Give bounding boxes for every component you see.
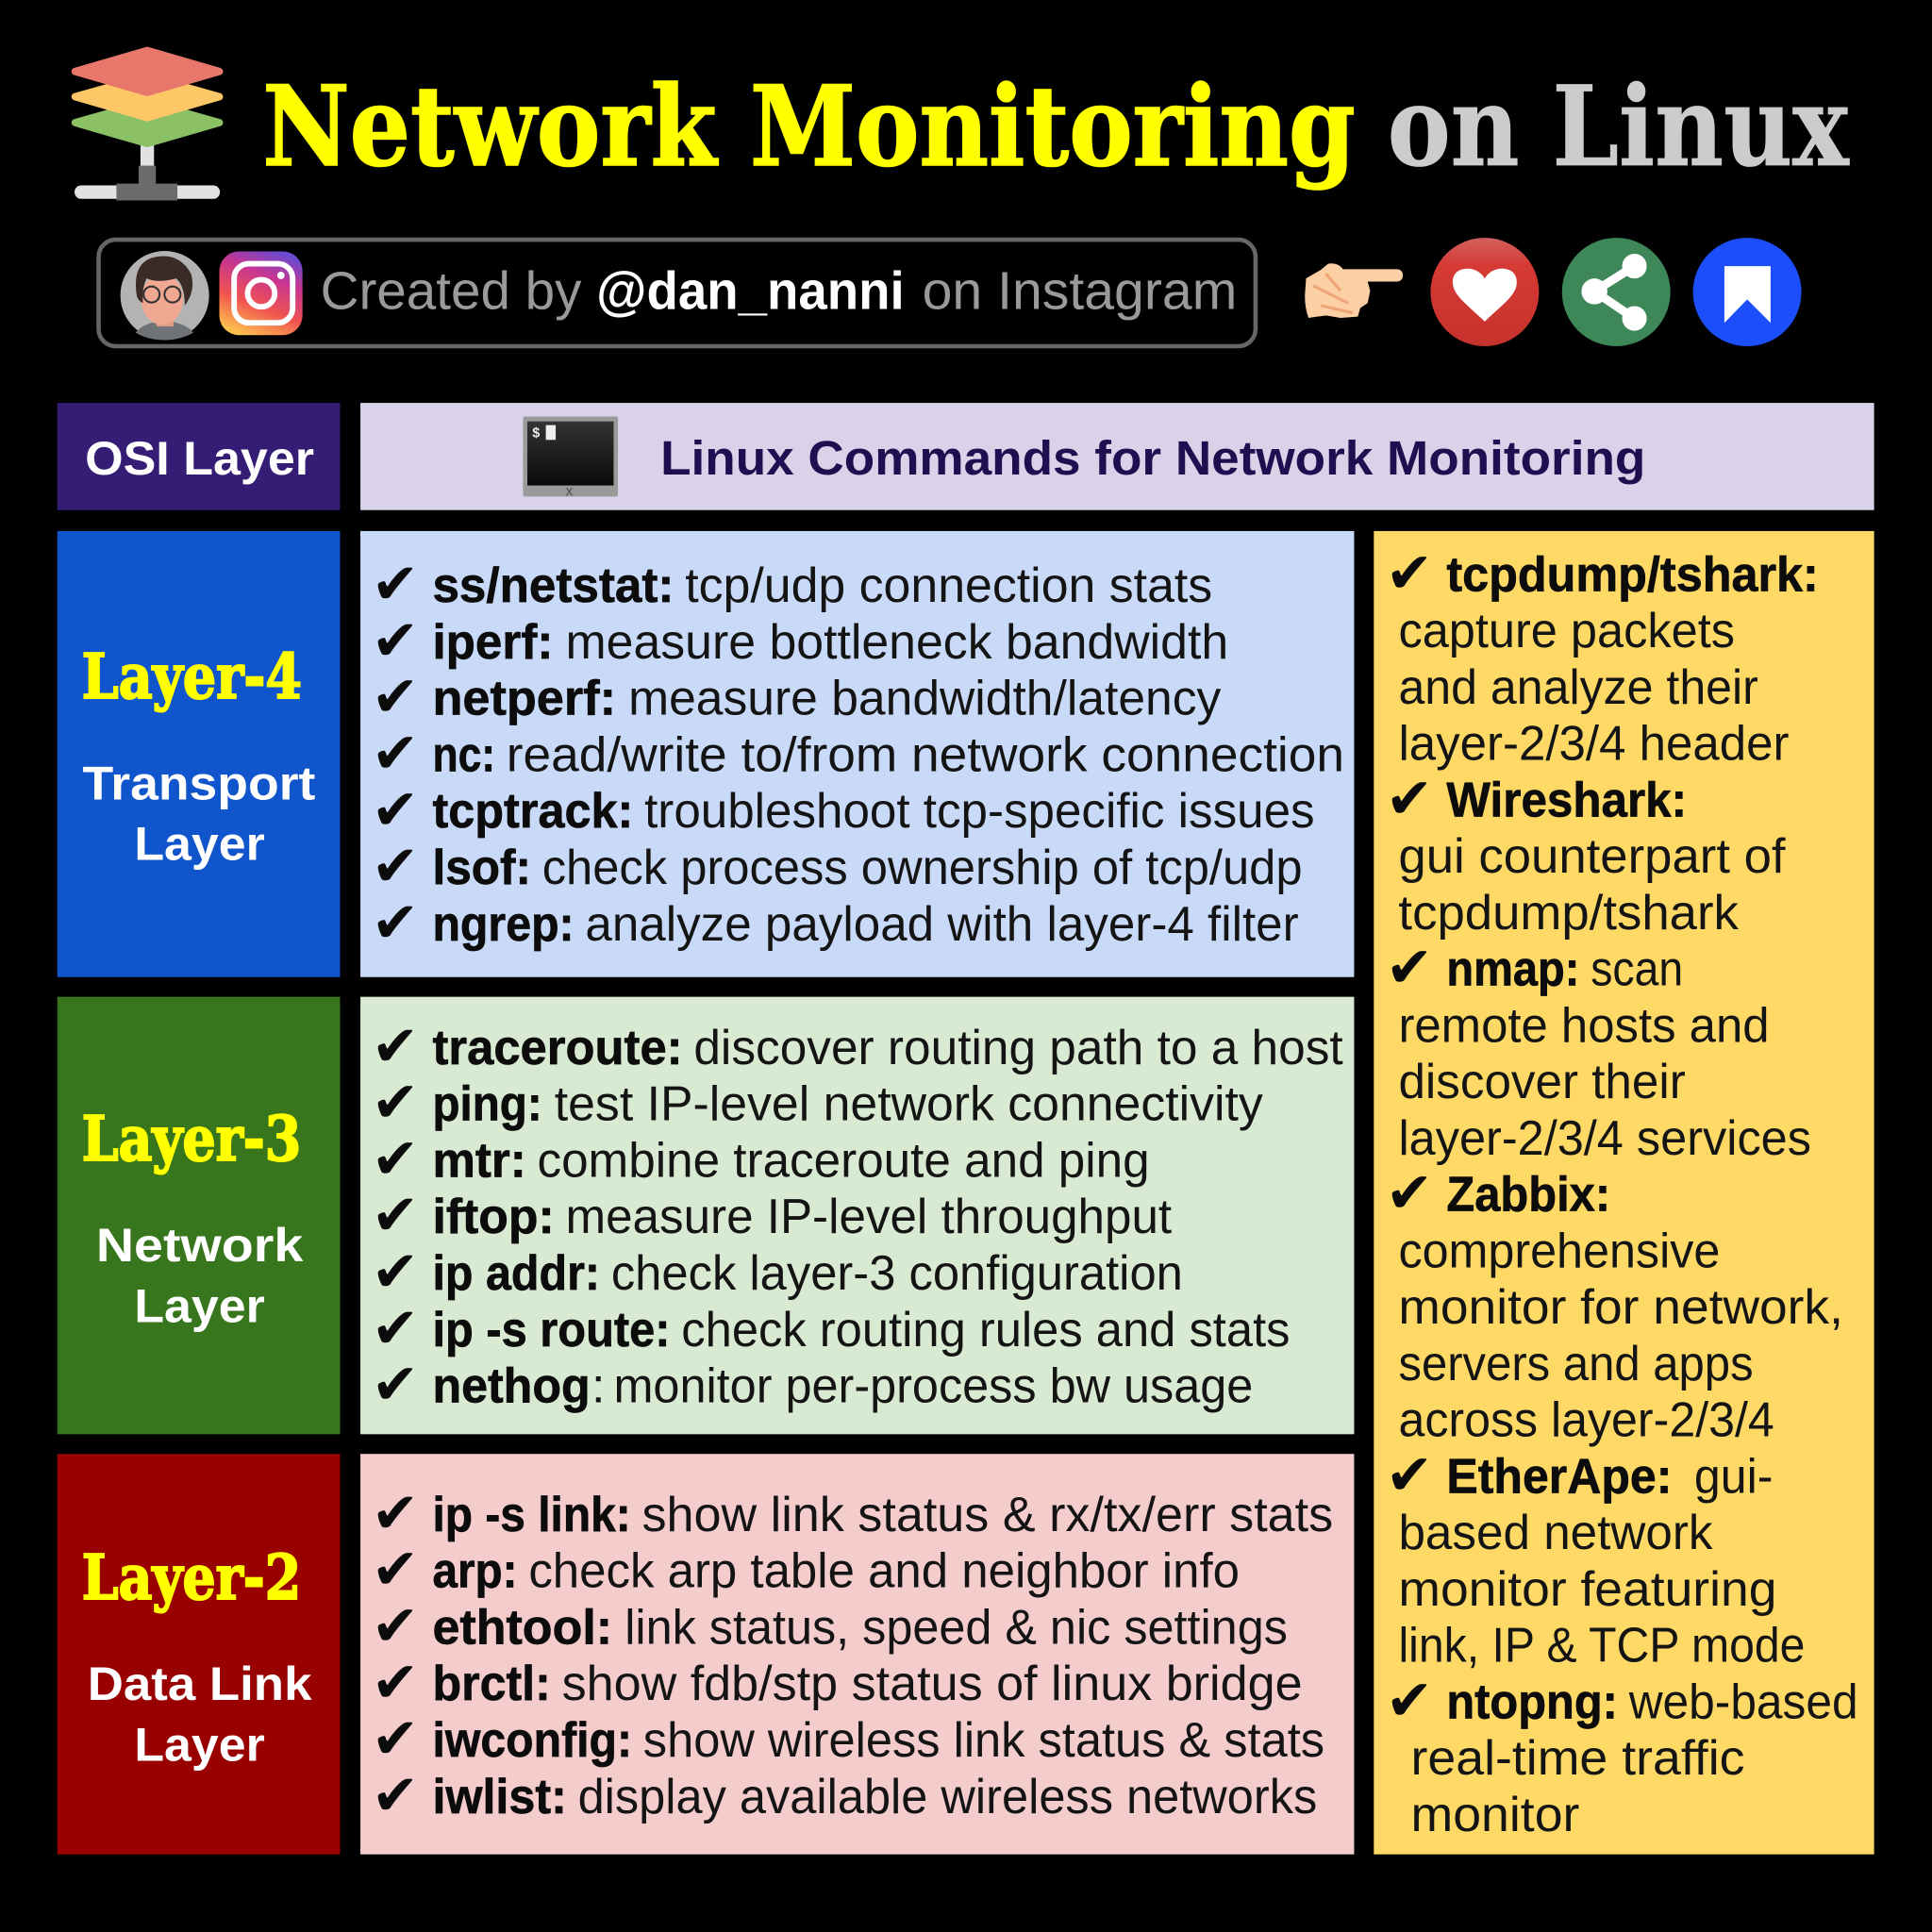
command: ip -s link: [372, 1480, 1333, 1546]
tool: tcpdump/tshark: tcpdump/tshark:: [1446, 547, 1819, 602]
command: iftop: measure IP-level throughput: [566, 1190, 1173, 1244]
panel: layer 3 label: Layer: [134, 1279, 265, 1332]
tool: tcpdump/tshark: ✔: [1386, 541, 1433, 607]
command: brctl: [372, 1650, 1303, 1716]
command: lsof: [372, 834, 1303, 900]
tool: nmap: layer-2/3/4 services: [1398, 1111, 1811, 1166]
command: ngrep: analyze payload with layer-4 filter: [585, 897, 1299, 952]
tool: ntopng: web-based: [1628, 1674, 1858, 1729]
command: iperf: measure bottleneck bandwidth: [566, 615, 1228, 670]
command: brctl: show fdb/stp status of linux bridge: [562, 1657, 1303, 1711]
command: lsof: ✔: [372, 834, 419, 900]
command: ip addr: [372, 1240, 1183, 1306]
command: nethog: [372, 1352, 1253, 1418]
command: nc: read/write to/from network connection: [507, 727, 1344, 782]
tool: EtherApe: gui-: [1694, 1449, 1774, 1504]
tool: ntopng: [1386, 1668, 1858, 1842]
tool: Zabbix: across layer-2/3/4: [1398, 1393, 1774, 1448]
command: ping: ping:: [432, 1077, 542, 1132]
tool: EtherApe: monitor featuring: [1398, 1562, 1776, 1617]
command: ping: [372, 1070, 1264, 1136]
command: ip -s route: ✔: [372, 1295, 419, 1361]
command: ip addr: ip addr:: [432, 1246, 600, 1301]
command: ss/netstat: [372, 552, 1212, 618]
command: traceroute: discover routing path to a host: [693, 1021, 1343, 1075]
tool: nmap: remote hosts and: [1398, 998, 1770, 1053]
header: linux commands: Linux Commands for Network Monitoring: [660, 431, 1645, 485]
creator badge: [98, 240, 1256, 346]
tool: EtherApe: link, IP & TCP mode: [1398, 1619, 1805, 1674]
tool: Zabbix: monitor for network,: [1398, 1280, 1843, 1335]
tool: EtherApe: [1386, 1442, 1805, 1674]
command: ip addr: ✔: [372, 1240, 419, 1306]
title: on Linux: [1388, 61, 1850, 192]
tool: tcpdump/tshark: and analyze their: [1398, 660, 1758, 715]
command: ngrep: ✔: [372, 890, 419, 956]
panel: cross-layer tools: [1374, 531, 1874, 1855]
command: traceroute: [372, 1013, 1343, 1079]
panel: layer 4 label: Layer: [134, 818, 265, 871]
icon: network layers: [75, 51, 220, 201]
panel: layer 3 label: Layer-3: [82, 1104, 301, 1175]
tool: Wireshark: tcpdump/tshark: [1398, 886, 1740, 941]
tool: Zabbix: comprehensive: [1398, 1224, 1720, 1278]
icon: terminal: X: [566, 487, 574, 499]
command: ss/netstat: ✔: [372, 552, 419, 618]
command: iwconfig: show wireless link status & stats: [643, 1713, 1324, 1768]
icon: instagram: [219, 251, 303, 335]
panel: layer 2 label: Data Link: [88, 1657, 312, 1710]
tool: Wireshark: ✔: [1386, 766, 1433, 832]
header: OSI layer: OSI Layer: [85, 432, 314, 485]
command: nethog: ✔: [372, 1352, 419, 1418]
tool: EtherApe: based network: [1398, 1506, 1713, 1560]
command: brctl: brctl:: [432, 1657, 551, 1711]
command: iwconfig: [372, 1707, 1324, 1773]
command: ping: ✔: [372, 1070, 419, 1136]
tool: nmap: ✔: [1386, 935, 1433, 1001]
command: traceroute: ✔: [372, 1013, 419, 1079]
command: netperf: [372, 664, 1222, 730]
panel: layer 2 commands: [360, 1454, 1354, 1855]
icon: terminal: $: [532, 426, 540, 441]
command: arp: ✔: [372, 1537, 419, 1603]
command: lsof: check process ownership of tcp/udp: [542, 841, 1303, 895]
command: ss/netstat: ss/netstat:: [432, 558, 674, 613]
command: iwconfig: ✔: [372, 1707, 419, 1773]
command: nc: ✔: [372, 721, 419, 787]
command: ngrep: [372, 890, 1299, 956]
command: ip -s link: show link status & rx/tx/err stats: [641, 1488, 1333, 1542]
command: tcptrack: tcptrack:: [432, 784, 633, 839]
icon: pointing hand: [1305, 263, 1403, 318]
command: arp: check arp table and neighbor info: [528, 1544, 1240, 1599]
command: ip -s route: ip -s route:: [432, 1303, 671, 1357]
command: netperf: netperf:: [432, 672, 616, 726]
command: mtr: mtr:: [432, 1133, 526, 1188]
command: ethtool: [372, 1593, 1288, 1659]
header: linux commands: [360, 403, 1874, 510]
icon: share: [1562, 238, 1671, 346]
panel: layer 4 label: Transport: [83, 757, 315, 809]
command: iwconfig: iwconfig:: [432, 1713, 632, 1768]
panel: layer 2 label: Layer: [134, 1718, 265, 1771]
panel: layer 4 label: [58, 531, 340, 977]
header: OSI layer: [58, 403, 340, 510]
tool: EtherApe: EtherApe:: [1446, 1449, 1672, 1504]
command: arp: [372, 1537, 1240, 1603]
title: Network Monitoring: [262, 61, 1356, 192]
command: tcptrack: troubleshoot tcp-specific issues: [644, 784, 1315, 839]
command: ss/netstat: tcp/udp connection stats: [685, 558, 1212, 613]
tool: ntopng: real-time traffic: [1411, 1731, 1744, 1786]
panel: layer 2 label: [58, 1454, 340, 1855]
command: iwlist: display available wireless networks: [578, 1770, 1317, 1824]
command: iperf: [372, 608, 1228, 674]
panel: layer 3 label: [58, 997, 340, 1434]
command: iftop: ✔: [372, 1183, 419, 1249]
tool: Zabbix: [1386, 1160, 1843, 1448]
tool: Zabbix: ✔: [1386, 1160, 1433, 1226]
tool: Zabbix: servers and apps: [1398, 1337, 1754, 1391]
tool: nmap: [1386, 935, 1811, 1166]
panel: layer 3 commands: [360, 997, 1354, 1434]
icon: avatar: [121, 251, 209, 340]
tool: nmap: discover their: [1398, 1055, 1686, 1109]
panel: layer 3 label: Network: [96, 1219, 304, 1272]
command: ping: test IP-level network connectivity: [555, 1077, 1264, 1132]
credit text: [321, 260, 1237, 320]
panel: layer 4 commands: [360, 531, 1354, 977]
tool: Zabbix: Zabbix:: [1446, 1168, 1610, 1223]
command: iwlist: ✔: [372, 1762, 419, 1828]
tool: Wireshark: [1386, 766, 1786, 941]
tool: Wireshark: Wireshark:: [1446, 773, 1687, 827]
command: mtr: combine traceroute and ping: [537, 1133, 1150, 1188]
command: mtr: ✔: [372, 1126, 419, 1192]
credit text: @dan_nanni: [596, 260, 905, 320]
command: netperf: ✔: [372, 664, 419, 730]
command: iwlist: [372, 1762, 1317, 1828]
tool: Wireshark: gui counterpart of: [1398, 829, 1786, 884]
command: ethtool: ✔: [372, 1593, 419, 1659]
tool: nmap: scan: [1591, 942, 1683, 997]
panel: layer 2 label: Layer-2: [82, 1542, 301, 1614]
command: ethtool: ethtool:: [432, 1600, 612, 1655]
command: traceroute: traceroute:: [432, 1021, 683, 1075]
command: nethog: nethog: [432, 1359, 591, 1414]
command: mtr: [372, 1126, 1150, 1192]
command: ip addr: check layer-3 configuration: [611, 1246, 1183, 1301]
command: ip -s route: check routing rules and stats: [681, 1303, 1291, 1357]
tool: nmap: nmap:: [1446, 942, 1579, 997]
tool: ntopng: ntopng:: [1446, 1674, 1618, 1729]
command: ip -s link: ip -s link:: [432, 1488, 631, 1542]
icon: terminal: [523, 416, 618, 499]
tool: ntopng: ✔: [1386, 1668, 1433, 1734]
command: iftop: [372, 1183, 1173, 1249]
command: nc: nc:: [432, 727, 495, 782]
tool: EtherApe: ✔: [1386, 1442, 1433, 1508]
command: iperf: ✔: [372, 608, 419, 674]
command: ip -s route: [372, 1295, 1291, 1361]
command: brctl: ✔: [372, 1650, 419, 1716]
command: nethog: monitor per-process bw usage: [613, 1359, 1253, 1414]
command: nethog: :: [591, 1359, 605, 1414]
tool: ntopng: monitor: [1411, 1788, 1579, 1842]
tool: tcpdump/tshark: layer-2/3/4 header: [1398, 716, 1789, 771]
icon: save: [1693, 238, 1802, 346]
command: iftop: iftop:: [432, 1190, 555, 1244]
credit text: on Instagram: [923, 260, 1237, 320]
credit text: Created by: [321, 260, 581, 320]
command: arp: arp:: [432, 1544, 518, 1599]
command: lsof: lsof:: [432, 841, 531, 895]
command: tcptrack: ✔: [372, 777, 419, 843]
icon: like: [1430, 238, 1539, 346]
command: netperf: measure bandwidth/latency: [628, 672, 1222, 726]
tool: tcpdump/tshark: capture packets: [1398, 604, 1735, 658]
command: nc: [372, 721, 1344, 787]
tool: tcpdump/tshark: [1386, 541, 1819, 771]
command: ethtool: link status, speed & nic settings: [625, 1600, 1288, 1655]
command: iperf: iperf:: [432, 615, 553, 670]
command: ngrep: ngrep:: [432, 897, 575, 952]
command: iwlist: iwlist:: [432, 1770, 567, 1824]
panel: layer 4 label: Layer-4: [82, 641, 302, 713]
command: ip -s link: ✔: [372, 1480, 419, 1546]
command: tcptrack: [372, 777, 1315, 843]
